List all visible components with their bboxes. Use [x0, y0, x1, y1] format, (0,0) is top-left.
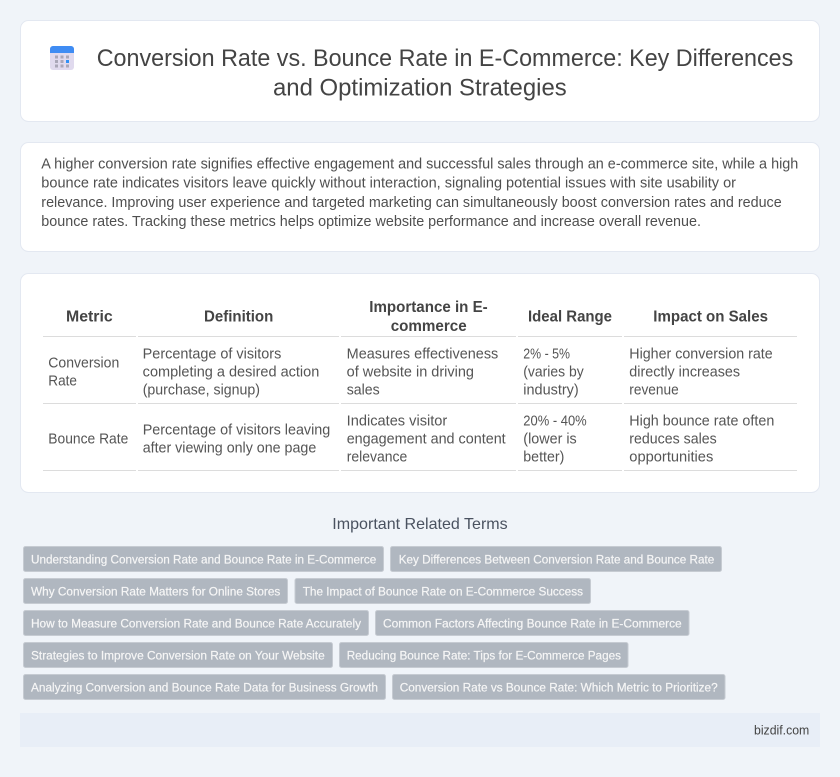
tag	[376, 610, 689, 636]
table row: conversion rate: directly increases	[629, 364, 740, 380]
heading: important related terms: Important Related Terms	[332, 516, 508, 533]
text block: summary: bounce rate indicates visitors leave quickly without interaction, signaling potential issues with site usability or	[41, 175, 736, 191]
table row: conversion rate: Rate	[48, 373, 77, 389]
table row: conversion rate: (purchase, signup)	[143, 382, 260, 398]
tag	[24, 610, 368, 636]
tag	[295, 578, 590, 604]
title: Conversion Rate vs. Bounce Rate in E-Commerce: Key Differences	[97, 45, 793, 72]
panel: related term tags	[24, 546, 725, 700]
table row: conversion rate: of website in driving	[347, 364, 474, 380]
table row: bounce rate: relevance	[347, 449, 407, 465]
table row: bounce rate: better)	[523, 449, 564, 465]
icon: calendar	[50, 46, 74, 70]
table row: conversion rate: Conversion	[48, 355, 119, 371]
table row: bounce rate: opportunities	[629, 449, 713, 465]
tag: How to Measure Conversion Rate and Bounce Rate Accurately	[31, 616, 362, 630]
panel: header	[20, 20, 820, 122]
tag: Understanding Conversion Rate and Bounce Rate in E-Commerce	[31, 552, 376, 566]
table row: bounce rate: High bounce rate often	[629, 413, 774, 429]
footer	[20, 713, 820, 747]
text block: summary: bounce rates. Tracking these metrics helps optimize website performance and increase overall revenue.	[41, 214, 701, 230]
table row: bounce rate: engagement and content	[347, 431, 506, 447]
tag	[24, 642, 332, 668]
table row: conversion rate: industry)	[523, 382, 579, 398]
tag: Key Differences Between Conversion Rate and Bounce Rate	[399, 552, 714, 566]
tag	[24, 674, 386, 700]
tag	[24, 546, 384, 572]
table row: conversion rate: revenue	[629, 382, 679, 398]
table header row: Impact on Sales	[653, 308, 768, 325]
panel: intro paragraph	[20, 142, 820, 252]
tag: Analyzing Conversion and Bounce Rate Data for Business Growth	[31, 680, 378, 694]
table header row: Ideal Range	[528, 308, 612, 325]
table row: bounce rate	[48, 413, 774, 465]
table row: conversion rate: Percentage of visitors	[143, 346, 281, 362]
tag: Reducing Bounce Rate: Tips for E-Commerce Pages	[347, 648, 621, 662]
tag	[340, 642, 628, 668]
table row: bounce rate: after viewing only one page	[143, 441, 316, 457]
table row: conversion rate: sales	[347, 382, 380, 398]
table header row: Metric	[66, 308, 113, 325]
table header row: Definition	[204, 308, 273, 325]
tag: Common Factors Affecting Bounce Rate in E-Commerce	[383, 616, 682, 630]
tag	[392, 674, 725, 700]
panel: comparison table	[20, 274, 820, 492]
table row: bounce rate: Indicates visitor	[347, 413, 447, 429]
table row: bounce rate: reduces sales	[629, 431, 717, 447]
table header row	[66, 299, 768, 335]
table row: conversion rate	[48, 346, 773, 398]
table row: bounce rate: Bounce Rate	[48, 431, 128, 447]
table row: conversion rate: 2% - 5%	[523, 346, 570, 362]
tag	[24, 578, 288, 604]
table row: conversion rate: (varies by	[523, 364, 584, 380]
table header row: Importance in E-	[369, 299, 488, 316]
text block: summary	[41, 156, 798, 230]
table row: bounce rate: Percentage of visitors leaving	[143, 423, 330, 439]
table row: conversion rate: Measures effectiveness	[347, 346, 498, 362]
tag	[390, 546, 722, 572]
text block: summary: A higher conversion rate signifies effective engagement and successful sales through an e-commerce site, while a high	[41, 156, 798, 172]
table row: bounce rate: 20% - 40%	[523, 413, 587, 429]
title: and Optimization Strategies	[273, 74, 567, 101]
tag: The Impact of Bounce Rate on E-Commerce Success	[303, 584, 583, 598]
tag: Strategies to Improve Conversion Rate on Your Website	[31, 648, 325, 662]
footer text: site name: bizdif.com	[754, 722, 809, 737]
tag: Why Conversion Rate Matters for Online Stores	[31, 584, 280, 598]
tag: Conversion Rate vs Bounce Rate: Which Metric to Prioritize?	[400, 680, 718, 694]
table header row: commerce	[391, 318, 467, 335]
table row: conversion rate: Higher conversion rate	[629, 346, 773, 362]
text block: summary: relevance. Improving user experience and targeted marketing can simultaneously boost conversion rates and reduce	[41, 195, 782, 211]
table row: conversion rate: completing a desired action	[143, 364, 319, 380]
title	[97, 45, 793, 101]
table row: bounce rate: (lower is	[523, 431, 577, 447]
